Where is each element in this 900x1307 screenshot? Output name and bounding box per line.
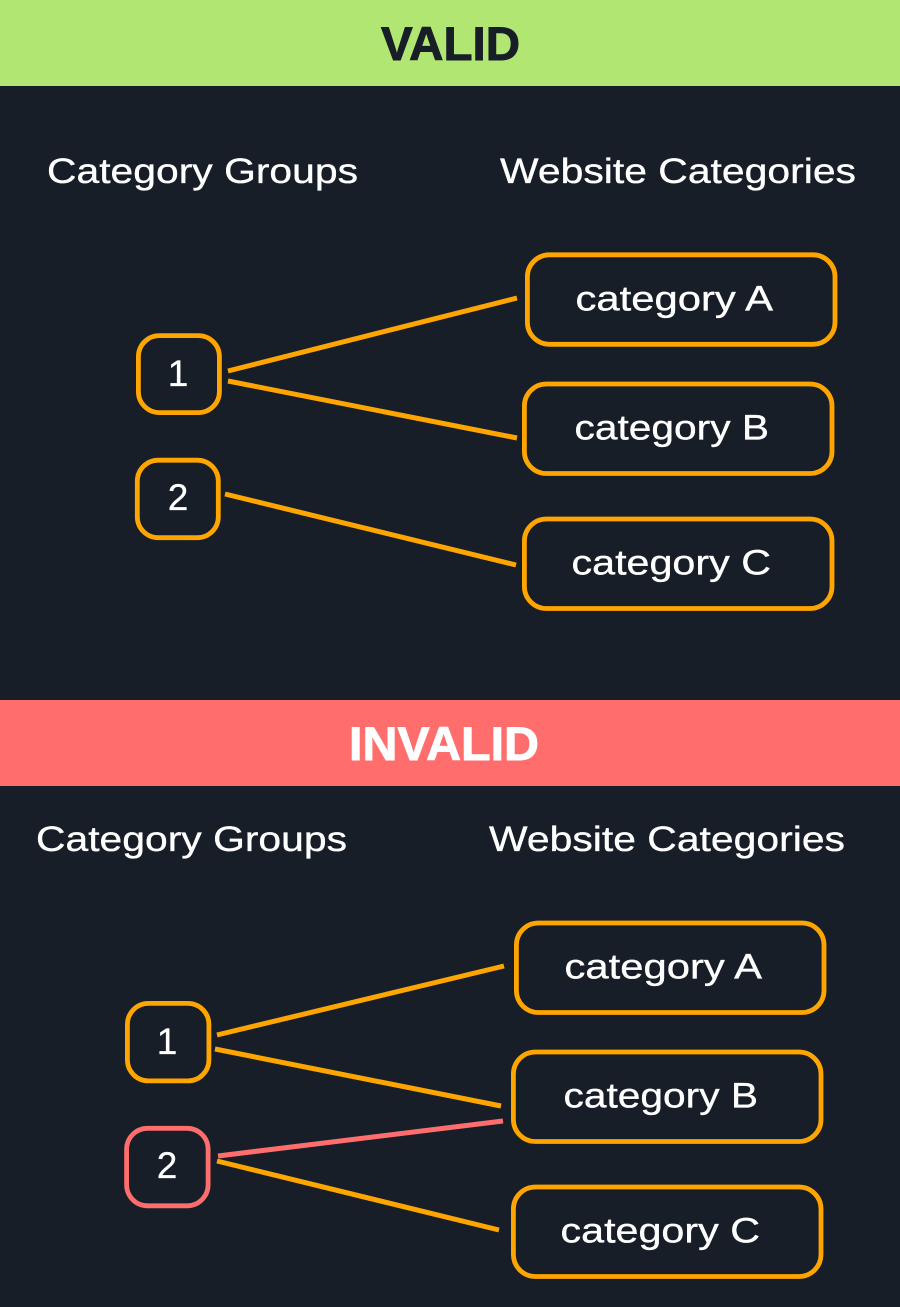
connector 2 to C [217, 1161, 499, 1230]
group 2 box, invalid: 2 [157, 1145, 177, 1186]
group 1 box: 1 [168, 353, 188, 394]
category C box [513, 1187, 821, 1276]
connector 2 to C [225, 494, 516, 565]
category C box: category C [560, 1210, 760, 1250]
connector 1 to A [217, 966, 504, 1035]
category A box [527, 255, 835, 344]
category A box: category A [564, 946, 762, 986]
connector 1 to A [228, 298, 517, 371]
group 2 box: 2 [168, 477, 188, 518]
heading: category groups: Category Groups [47, 151, 358, 191]
panel: valid [0, 0, 900, 608]
category B box [524, 384, 832, 474]
valid banner: VALID [381, 17, 520, 70]
invalid banner [0, 700, 900, 786]
category B box: category B [574, 408, 769, 448]
group 1 box [127, 1003, 209, 1081]
category C box [524, 519, 832, 608]
group 2 box [137, 460, 218, 538]
connector 1 to B [215, 1049, 501, 1106]
category B box [513, 1052, 821, 1142]
category A box [516, 923, 824, 1012]
heading: website categories: Website Categories [500, 151, 856, 191]
heading: category groups: Category Groups [36, 819, 347, 859]
connector 2 to B, invalid [218, 1121, 503, 1156]
category A box: category A [576, 278, 773, 318]
valid banner [0, 0, 900, 86]
panel: invalid [0, 700, 900, 1276]
connector 1 to B [228, 381, 517, 438]
heading: website categories: Website Categories [489, 819, 845, 859]
category B box: category B [564, 1076, 758, 1116]
invalid banner: INVALID [349, 717, 539, 770]
category C box: category C [572, 542, 771, 582]
group 1 box: 1 [157, 1021, 177, 1062]
group 1 box [138, 336, 219, 413]
group 2 box, invalid [127, 1128, 208, 1206]
